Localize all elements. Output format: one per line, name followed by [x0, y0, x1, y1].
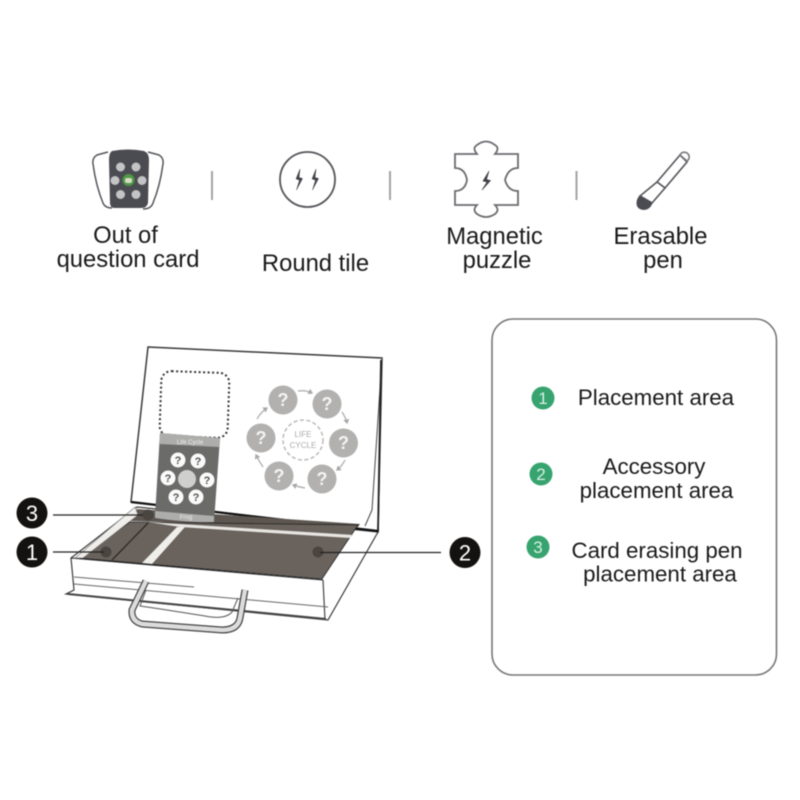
text: Erasable pen: Erasable [614, 223, 707, 250]
small card: ? [195, 456, 202, 468]
legend item 3: Card erasing pen [571, 538, 743, 563]
marker dots [100, 510, 324, 558]
legend item 2: Accessory [603, 454, 706, 479]
text: Round tile: Round tile [262, 250, 369, 277]
legend item 2 [530, 454, 734, 503]
small card: Life Cycle [177, 440, 204, 446]
dotted card placeholder [159, 371, 230, 438]
life cycle diagram: ? [338, 433, 349, 453]
panel: placement legend [492, 319, 776, 675]
handle [132, 581, 245, 630]
text: Out of question card: Out of [93, 222, 158, 249]
legend item 3 [526, 536, 743, 586]
life cycle diagram: LIFE [295, 430, 311, 439]
life cycle diagram: ? [274, 466, 284, 486]
illustration: open case [66, 347, 382, 630]
callout 2 [320, 537, 480, 568]
case base [66, 502, 378, 620]
lid [131, 347, 382, 532]
callout 2: 2 [459, 540, 471, 566]
icon: magnetic puzzle [455, 142, 518, 217]
life cycle diagram [246, 386, 358, 494]
callout 3 [16, 498, 143, 528]
text: Magnetic puzzle: Magnetic [446, 223, 543, 250]
small card: ? [165, 473, 172, 485]
life cycle diagram: ? [316, 469, 328, 489]
legend item 1: Placement area [578, 385, 735, 410]
small card: ? [175, 455, 182, 467]
icon: erasable pen [637, 152, 689, 210]
small card: Frog [180, 515, 192, 521]
callout 3: 3 [26, 501, 38, 526]
text: Magnetic puzzle: puzzle [463, 247, 531, 274]
divider 1 [211, 171, 213, 200]
life cycle diagram: ? [256, 428, 266, 448]
life cycle diagram: ? [322, 394, 332, 414]
icon: question card [93, 150, 163, 209]
divider 2 [389, 171, 391, 200]
text: Erasable pen: pen [643, 247, 683, 274]
small card: ? [173, 492, 180, 504]
legend item 2: 2 [536, 465, 546, 484]
small card: ? [204, 475, 211, 487]
legend item 1: 1 [538, 389, 548, 408]
life cycle diagram: CYCLE [290, 441, 316, 450]
text: Out of question card [57, 222, 199, 273]
small card: ? [193, 492, 200, 504]
legend item 2: placement area [580, 478, 734, 503]
life cycle diagram: ? [278, 390, 288, 410]
legend item 3: placement area [583, 562, 737, 586]
text: Magnetic puzzle [446, 223, 543, 274]
icon: round tile [280, 152, 335, 207]
callout 1: 1 [26, 540, 38, 565]
text: Out of question card: question card [57, 246, 199, 273]
small card [155, 433, 220, 522]
legend item 3: 3 [533, 538, 543, 557]
text: Erasable pen [614, 223, 707, 274]
callout 1 [16, 536, 104, 568]
divider 3 [576, 171, 578, 200]
